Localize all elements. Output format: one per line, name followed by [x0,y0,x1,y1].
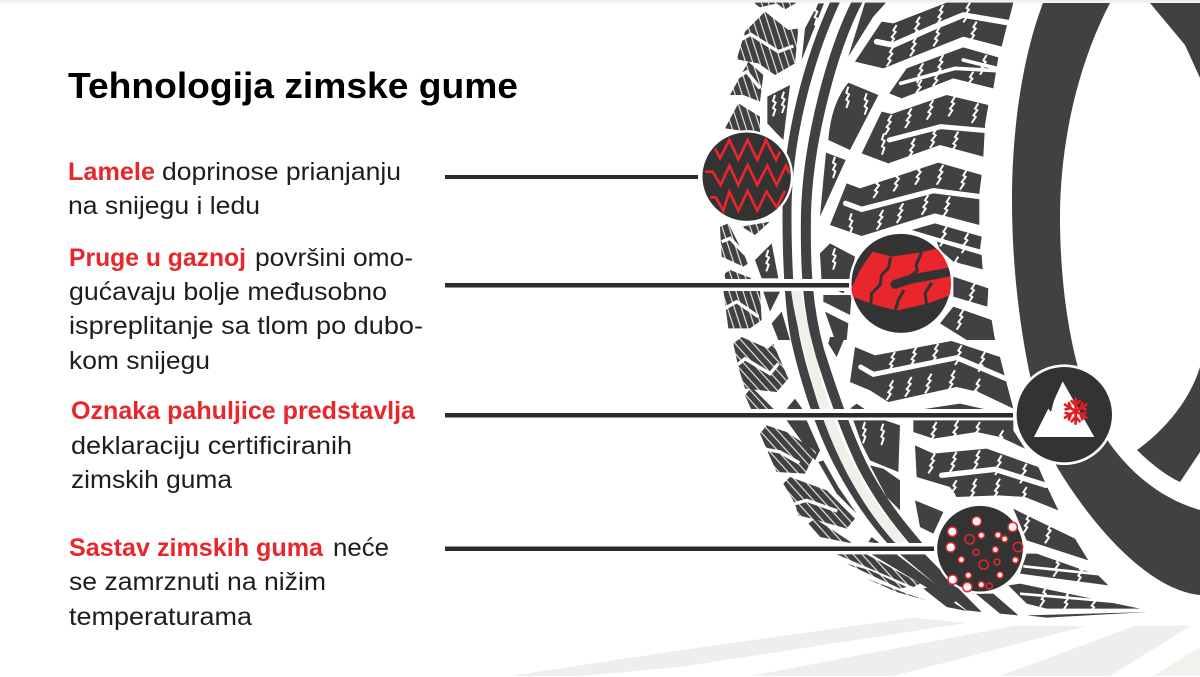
right chevron group 9 [915,500,1148,618]
text block: sastav: neće [333,534,389,562]
text block: oznaka: deklaraciju certificiranih [71,432,352,460]
tread blocks upper [720,3,1013,340]
leader line: sastav [445,543,935,554]
right chevron group 8 [915,445,1058,510]
road stripes [513,618,1200,676]
outer tread blocks lower [733,337,927,600]
outer shoulder blocks upper [755,85,790,340]
leader line: oznaka [445,409,1015,420]
outer block slots lower [737,359,837,511]
text block: pruge: gućavaju bolje međusobno [69,278,387,306]
right chevron group 3 [862,95,988,163]
leader line: pruge [445,279,850,291]
right chevron group 6 [850,341,1013,409]
text block: sastav: Sastav zimskih guma [69,534,324,562]
text block: pruge: površini omo- [255,244,413,272]
text block: lamele: na snijegu i ledu [68,192,260,220]
text block: pruge: Pruge u gaznoj [69,244,246,272]
right chevron group 4 [830,163,982,236]
text block: lamele [68,158,401,220]
text block: pruge: kom snijegu [69,347,210,375]
left shoulder blocks of centre column [802,3,886,340]
text block: sastav [69,534,389,631]
icon: tread grooves circle [848,233,957,334]
tire illustration [720,0,1200,618]
right chevron group 7 [913,404,1025,450]
tread centre ribs [787,0,920,550]
right chevron group 5 [912,223,995,340]
text block: sastav: se zamrznuti na nižim [69,568,326,596]
outer tread blocks upper [720,3,798,328]
text block: lamele: doprinose prianjanju [162,158,401,186]
title: Tehnologija zimske gume [68,65,518,106]
leader line: lamele [445,175,698,179]
text block: sastav: temperaturama [69,603,252,631]
outer block slots upper [722,34,793,317]
text block: oznaka: Oznaka pahuljice predstavlja [71,397,416,425]
icon: compound bubbles circle [936,505,1024,593]
text block: pruge [69,244,423,375]
top edge strip [0,0,1200,2]
text block: oznaka [71,397,416,494]
centre column blocks lower [787,337,900,544]
text block: oznaka: zimskih guma [71,466,232,494]
icon: snow mountain circle [1015,366,1113,464]
right chevron group 1 [855,3,1013,68]
bottom tread bands [872,554,1018,615]
text block: lamele: Lamele [68,158,155,186]
tire sidewall ring [1012,3,1200,595]
right chevron group 2 [889,47,998,100]
tire inner rim wedges [1137,3,1200,482]
icon: sipes zigzag circle [701,131,792,222]
tread blocks lower [733,337,1148,618]
text block: pruge: ispreplitanje sa tlom po dubo- [69,312,423,340]
